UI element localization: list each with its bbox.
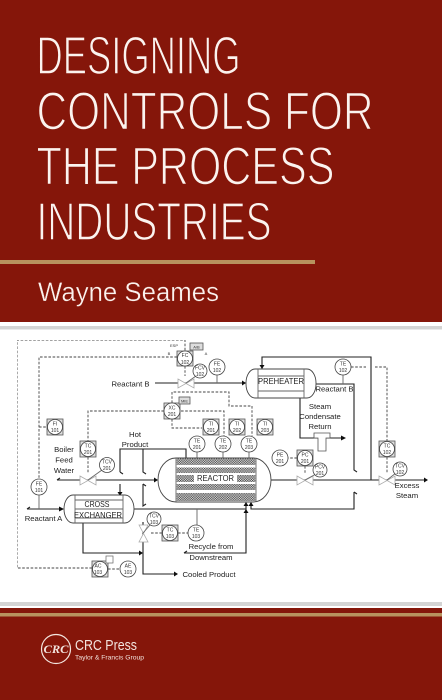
A/B box — [190, 343, 203, 350]
stream labels: Product — [122, 440, 149, 449]
instrument PE 201: 201 — [276, 459, 284, 465]
stream labels: Recycle from — [189, 542, 233, 551]
instrument TE 103: TE — [193, 528, 200, 534]
instrument TE 102 — [335, 359, 351, 375]
instrument FI 101: FI — [53, 422, 57, 428]
instrument TI 201: TI — [209, 422, 213, 428]
instrument TC 103: TC — [167, 528, 174, 534]
reactor: REACTOR — [197, 473, 234, 483]
MIE box — [179, 397, 190, 404]
instrument TE 201 — [189, 436, 205, 452]
instrument PC 201: 201 — [301, 459, 309, 465]
instrument FE 101: 101 — [35, 488, 43, 494]
stream labels: Excess — [395, 481, 420, 490]
publisher group: Taylor & Francis Group — [75, 654, 144, 662]
instrument FI 101: 101 — [51, 428, 59, 434]
stream labels: Boiler — [54, 445, 74, 454]
instrument FE 102 — [209, 359, 225, 375]
instrument FE 101 — [31, 479, 47, 495]
instrument TE 202: TE — [220, 438, 227, 444]
instrument TCV 201 — [100, 458, 114, 472]
process piping — [27, 357, 424, 574]
cross exchanger — [64, 495, 134, 523]
instrument TE 203: TE — [246, 438, 253, 444]
lower grey band — [0, 602, 442, 606]
stream labels: Return — [308, 422, 332, 431]
instrument TE 203: 203 — [245, 445, 253, 451]
stream labels: Feed — [55, 456, 73, 464]
instrument TCV 201: 201 — [103, 466, 111, 472]
instrument TCV 201: TCV — [102, 460, 113, 466]
instrument TE 102: TE — [340, 362, 347, 368]
instrument FCV 102: FCV — [195, 366, 206, 372]
process flow diagram — [17, 340, 428, 579]
instrument FE 102: FE — [214, 362, 221, 368]
instrument FCV 102 — [193, 364, 207, 378]
stream labels: Reactant B — [315, 384, 354, 394]
A/B box: A/B — [193, 344, 200, 350]
instrument PCV 201: PCV — [315, 464, 326, 470]
instrument TI 201 — [203, 419, 219, 435]
instrument PC 201: PC — [302, 452, 309, 458]
MIE box: MIE — [181, 398, 188, 404]
instrument PE 201 — [272, 450, 288, 466]
instrument FC 102: 102 — [181, 360, 189, 366]
instrument TCV 103: TCV — [149, 514, 160, 520]
instrument TI 203: 203 — [261, 428, 269, 434]
instrument AE 103: 103 — [124, 570, 132, 576]
instrument AC 103: 103 — [94, 570, 102, 576]
instrument TC 201 — [80, 441, 96, 457]
reactor — [158, 458, 271, 502]
instrument TE 201: 201 — [193, 445, 201, 451]
tan rule — [0, 260, 315, 264]
title: THE PROCESS — [36, 137, 334, 197]
flow arrows — [59, 365, 428, 576]
publisher logo — [42, 634, 144, 664]
stream labels: Reactant A — [25, 514, 63, 523]
instrument TC 102: 102 — [383, 450, 391, 456]
instrument TE 203 — [241, 436, 257, 452]
cross exchanger: CROSS — [84, 499, 110, 509]
stream labels: Hot — [129, 430, 142, 439]
instrument FE 101: FE — [36, 482, 43, 488]
title: DESIGNING — [36, 26, 240, 86]
dashed control signals — [17, 340, 387, 569]
bottom tan rule — [0, 613, 442, 616]
stream labels: Water — [54, 466, 75, 475]
instrument TC 102: TC — [384, 444, 391, 450]
ESP B A labels: B — [168, 351, 171, 356]
instrument TC 201: 201 — [84, 450, 92, 456]
instrument TC 201: TC — [85, 444, 92, 450]
instrument TE 102: 102 — [339, 368, 347, 374]
stream labels: Steam — [396, 491, 418, 500]
instrument XC 201: 201 — [168, 412, 176, 418]
stems — [39, 375, 343, 577]
ESP B A labels: A — [205, 351, 208, 356]
stream labels — [25, 380, 420, 579]
instrument FE 102: 102 — [213, 368, 221, 374]
instrument TI 202 — [229, 419, 245, 435]
instrument TCV 102: 102 — [396, 470, 404, 476]
instrument TI 202: TI — [235, 422, 239, 428]
top red panel — [0, 0, 442, 322]
instrument TCV 103 — [147, 512, 161, 526]
instrument TE 202 — [215, 436, 231, 452]
instrument TI 201: 201 — [207, 428, 215, 434]
instrument PC 201 — [297, 450, 313, 466]
author: Wayne Seames — [38, 277, 219, 307]
icon: CRC circle: CRC — [44, 642, 70, 656]
instrument PCV 201 — [313, 463, 327, 477]
instrument TCV 102 — [393, 462, 407, 476]
title — [36, 26, 374, 252]
instrument TC 103 — [162, 525, 178, 541]
instrument TCV 102: TCV — [395, 464, 406, 470]
instrument TC 102 — [379, 441, 395, 457]
stream labels: Steam — [309, 402, 331, 411]
ESP B A labels — [168, 343, 208, 356]
stream labels: Downstream — [189, 553, 233, 562]
instrument TE 103 — [188, 525, 204, 541]
instrument TE 103: 103 — [192, 534, 200, 540]
instrument PE 201: PE — [277, 452, 284, 458]
instrument AC 103 — [92, 556, 113, 577]
instrument FCV 102: 102 — [196, 372, 204, 378]
publisher name: CRC Press — [75, 638, 137, 654]
instrument AE 103 — [120, 561, 136, 577]
instrument TI 203 — [257, 419, 273, 435]
valve actuator links — [88, 376, 396, 533]
instrument FI 101 — [47, 419, 63, 435]
instrument XC 201 — [164, 403, 180, 419]
preheater: PREHEATER — [258, 376, 304, 386]
instrument TE 202: 202 — [219, 445, 227, 451]
preheater — [246, 369, 316, 398]
instrument TC 103: 103 — [166, 534, 174, 540]
bottom red panel — [0, 608, 442, 700]
instrument PCV 201: 201 — [316, 471, 324, 477]
stream labels: Reactant B — [111, 380, 150, 388]
instrument XC 201: XC — [169, 406, 176, 412]
instrument TI 203: TI — [263, 422, 267, 428]
instrument FC 102 — [177, 351, 193, 366]
instrument TI 202: 202 — [233, 428, 241, 434]
instrument TCV 103: 103 — [150, 520, 158, 526]
stream labels: Cooled Product — [182, 570, 236, 579]
instrument AE 103: AE — [125, 564, 132, 570]
instrument TE 201: TE — [194, 438, 201, 444]
cross exchanger: EXCHANGER — [74, 510, 122, 520]
ESP B A labels: ESP — [170, 343, 178, 348]
instrument AC 103: AC — [95, 564, 102, 570]
title: INDUSTRIES — [36, 192, 272, 252]
condensate trap — [314, 433, 330, 451]
instrument FC 102: FC — [182, 353, 189, 359]
valves — [80, 379, 395, 542]
upper grey band — [0, 326, 442, 330]
stream labels: Condensate — [299, 412, 341, 421]
